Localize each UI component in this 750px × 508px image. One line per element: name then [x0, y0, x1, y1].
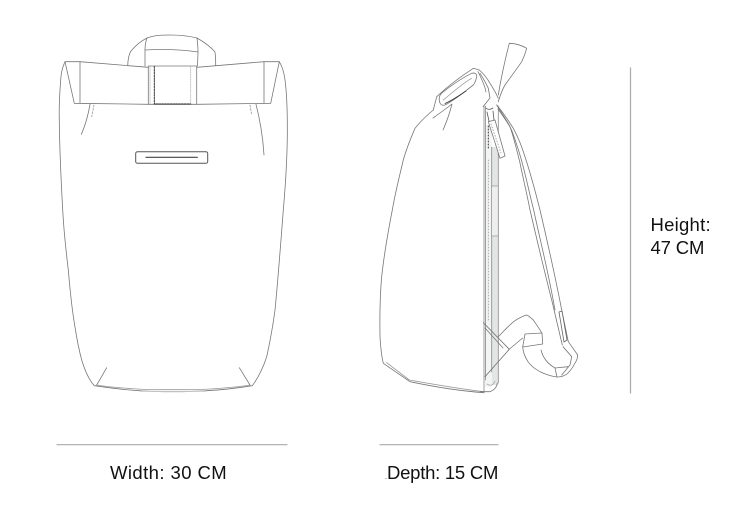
- front handle: [128, 35, 216, 66]
- front bottom seam: [97, 385, 250, 390]
- side zip panel: [480, 106, 498, 393]
- side lower webbing: [483, 315, 542, 377]
- dimension line: height: [630, 68, 632, 393]
- label: height: 47 CM: [650, 237, 704, 258]
- front creases: [81, 104, 264, 385]
- side buckle: [523, 333, 543, 347]
- side base seam: [387, 363, 483, 392]
- side strap: [497, 105, 578, 377]
- side view of backpack: [380, 43, 578, 393]
- front body outline: [59, 62, 287, 392]
- side strap end: [541, 347, 572, 377]
- side roll top: [433, 68, 498, 130]
- front view of backpack: [59, 35, 287, 392]
- label: height: [650, 214, 711, 258]
- side top tab: [498, 43, 527, 102]
- label: depth: Depth: 15 CM: [387, 462, 498, 483]
- side zip pull tab: [492, 186, 498, 236]
- front roll top: [65, 62, 279, 104]
- front pocket: [136, 152, 208, 163]
- front centre strap: [148, 66, 197, 104]
- dimension line: depth: [380, 444, 498, 446]
- side zip puller: [486, 108, 505, 158]
- side body outline: [380, 110, 484, 393]
- speck near depth: [385, 478, 387, 480]
- label: height: Height:: [650, 214, 711, 235]
- label: width: Width: 30 CM: [110, 462, 227, 483]
- dimension line: width: [57, 444, 287, 446]
